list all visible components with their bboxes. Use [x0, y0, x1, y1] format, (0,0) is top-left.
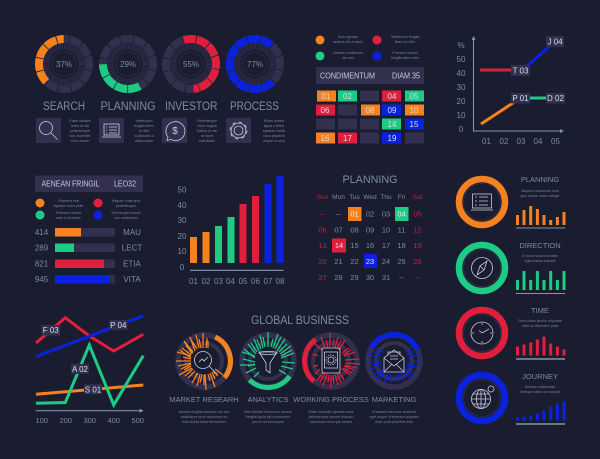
chart: vertical bar chart: 20	[178, 232, 187, 241]
calendar text: 31	[382, 273, 390, 282]
chart: vertical bar chart: 10	[178, 247, 187, 256]
panel: planning metric	[459, 175, 565, 228]
icon: laptop list	[99, 118, 124, 143]
calendar text: 01	[350, 210, 359, 218]
chart: multi-line chart: 100	[35, 416, 48, 425]
heading bar	[35, 176, 143, 192]
text: process description: Etiam viverra	[264, 119, 284, 123]
text: search description: Etiam facilisis	[69, 119, 91, 123]
calendar text: Thu	[380, 194, 392, 201]
number grid: 17	[343, 134, 352, 143]
panel: analytics gauge: ANALYTICS	[247, 395, 289, 404]
calendar text: --	[399, 273, 404, 282]
calendar text: 02	[366, 210, 374, 218]
calendar text: --	[320, 210, 325, 218]
calendar text: 12	[413, 226, 422, 234]
panel: analytics gauge: Sed ultricies lectus non laoreet	[244, 410, 292, 414]
panel: marketing gauge	[358, 325, 430, 424]
calendar text: 27	[318, 273, 327, 282]
calendar text: Sat	[413, 194, 423, 201]
calendar text: 21	[334, 257, 343, 266]
heading bar	[316, 67, 424, 84]
calendar text: Fri	[398, 194, 405, 201]
chart: milestone line chart: 10	[457, 111, 466, 120]
gauge	[358, 325, 430, 397]
calendar text: 13	[318, 241, 327, 250]
ring: planning 29%: 29%	[120, 60, 136, 69]
number grid: 09	[388, 106, 397, 115]
panel: journey metric: JOURNEY	[522, 372, 558, 381]
progress bars: 945	[35, 275, 49, 284]
calendar text: Tus	[349, 194, 361, 201]
chart: vertical bar chart: 01	[189, 277, 198, 286]
text: search description: tellus id nisi	[71, 124, 89, 128]
legend: libero at nibh	[395, 40, 415, 44]
legend: egestas tortor pelle	[54, 204, 83, 208]
calendar text: 05	[413, 210, 422, 218]
calendar text: 04	[397, 210, 406, 218]
text: investor description: finibus id nisl	[197, 129, 217, 133]
chart: multi-line chart	[35, 316, 144, 425]
chart: multi-line chart: 300	[83, 416, 96, 425]
legend: dui sed	[342, 56, 354, 60]
chart: multi-line chart: F 03	[43, 326, 59, 335]
panel: planning metric: quis ornare luctus integer	[520, 194, 560, 198]
panel: marketing gauge: dolor proin pharetra ante	[375, 420, 413, 424]
legend	[316, 35, 419, 60]
chart: vertical bar chart: 07	[264, 277, 273, 286]
chart: milestone line chart: 40	[457, 69, 466, 78]
panel: progress rings	[29, 29, 290, 113]
panel: journey metric	[459, 372, 565, 424]
ring labels: INVESTOR	[165, 99, 218, 113]
chart: vertical bar chart: 05	[239, 277, 248, 286]
calendar text: 09	[366, 226, 374, 234]
ring labels: PLANNING	[100, 99, 156, 113]
chart: vertical bar chart: 50	[178, 186, 187, 194]
legend: pellentesque	[116, 204, 136, 208]
chart: milestone line chart: 0	[459, 125, 464, 134]
chart: multi-line chart: 500	[131, 416, 144, 425]
ring: search 37%	[29, 29, 99, 99]
text: planning description: feugiat libero	[134, 124, 154, 128]
calendar text: 17	[382, 241, 390, 250]
panel: market research gauge: vestibulum nunc accumsan eu	[180, 415, 228, 419]
ring labels: SEARCH	[43, 99, 85, 113]
chart: milestone line chart: P 01	[512, 94, 529, 103]
chart: milestone line chart: T 03	[513, 66, 529, 76]
ring: investor 55%: 55%	[183, 60, 199, 69]
legend: nec vestibulum	[114, 216, 138, 220]
chart: multi-line chart: S 01	[85, 385, 102, 394]
number grid: 08	[366, 106, 375, 115]
gauge	[294, 324, 368, 398]
calendar text: 26	[413, 257, 422, 266]
ring: process 77%: 77%	[247, 60, 263, 69]
ring: planning 29%	[94, 30, 162, 98]
chart: milestone line chart: 03	[517, 137, 526, 146]
chart: vertical bar chart: 03	[214, 277, 223, 286]
text: search description: eros ornare	[71, 139, 89, 143]
chart: vertical bar chart: 08	[276, 277, 285, 286]
chart: multi-line chart: A 02	[72, 365, 89, 374]
mini bars	[518, 206, 564, 225]
calendar text: Wed	[363, 194, 377, 201]
progress bars	[35, 228, 142, 284]
number grid: 10	[410, 106, 419, 115]
panel: market research gauge	[169, 326, 239, 424]
chart: multi-line chart: 400	[107, 416, 120, 425]
heading bar: DIAM 35	[392, 72, 420, 80]
icon: compass in green ring	[459, 245, 505, 291]
chart: milestone line chart: %	[457, 41, 465, 50]
panel: analytics gauge: fringilla ligula elit consectetur	[246, 415, 291, 419]
number grid: 02	[343, 92, 352, 101]
calendar text: 11	[398, 226, 405, 234]
chart: milestone line chart: 02	[500, 137, 509, 146]
text: process description: nunc placerat	[263, 134, 285, 138]
calendar text: --	[415, 273, 420, 282]
legend: Aliquam vitae arcu	[112, 199, 140, 203]
number grid: 14	[388, 120, 397, 129]
legend: ante id faucibus	[56, 216, 81, 220]
text: process description: ligula a tellus	[264, 124, 284, 128]
calendar text	[317, 194, 423, 282]
heading: global business: GLOBAL BUSINESS	[251, 315, 349, 327]
panel: working process gauge: Etiam molestie egestas tortor	[308, 410, 354, 414]
mini bars	[518, 271, 564, 290]
icon: gear	[226, 118, 251, 143]
legend: Praesent molest	[392, 51, 418, 55]
gauge	[169, 326, 239, 396]
day highlights	[332, 207, 408, 268]
chart: milestone line chart: J 04	[547, 38, 563, 46]
text: investor description: sollicitudin	[199, 139, 215, 143]
chart: milestone line chart: 50	[457, 55, 466, 64]
panel: time metric: TIME	[531, 306, 549, 315]
chart: vertical bar chart: 04	[226, 277, 235, 286]
chart: milestone line chart: 01	[482, 137, 491, 146]
legend: Sed feugiat mauris	[111, 211, 141, 215]
ring: search 37%: 37%	[56, 60, 72, 69]
legend: Aenean vestibulum	[333, 51, 363, 55]
text: investor description: sit amet	[201, 134, 213, 138]
chart: milestone line chart: 04	[534, 137, 543, 146]
chart: milestone line chart: 20	[457, 97, 466, 106]
text: planning description: ullamcorper	[135, 139, 154, 143]
mini bars	[518, 402, 564, 420]
chart: multi-line chart: 200	[59, 416, 72, 425]
chart: vertical bar chart: 06	[251, 277, 260, 286]
icon: globe in blue ring	[459, 375, 505, 421]
panel: working process gauge	[293, 324, 369, 424]
heading bar: LEO32	[114, 180, 136, 188]
panel: market research gauge: MARKET RESEARH	[169, 395, 239, 404]
calendar text: 24	[382, 257, 390, 266]
panel: aenean fringil progress bars	[35, 176, 143, 284]
chart: vertical bar chart: 0	[180, 263, 185, 272]
calendar text: 03	[382, 210, 390, 218]
calendar text: Sun	[317, 194, 329, 201]
calendar text: 22	[350, 257, 359, 266]
chart: milestone line chart	[457, 36, 565, 146]
panel: direction metric: DIRECTION	[519, 241, 561, 250]
legend: Vestibulum feugiat	[391, 35, 419, 39]
number grid: 05	[410, 92, 419, 101]
panel: working process gauge: WORKING PROCESS	[293, 395, 369, 404]
chart: vertical bar chart: 02	[202, 277, 211, 286]
icon: dollar bubble	[162, 118, 187, 143]
calendar text: 18	[397, 241, 406, 250]
ring labels	[43, 99, 279, 113]
number grid: 15	[410, 120, 419, 129]
calendar text: 19	[413, 241, 422, 250]
panel: marketing gauge: MARKETING	[372, 395, 416, 404]
number grid: 19	[388, 134, 397, 143]
panel: market research gauge: Aenean fringilla interdum leo nec	[179, 410, 230, 414]
calendar text: 30	[366, 273, 374, 282]
text: planning description: at nibh	[139, 129, 149, 133]
calendar text: 16	[366, 241, 374, 250]
legend: Praesent erat	[58, 199, 79, 203]
text: search description: non imperdiet	[69, 134, 91, 138]
panel: marketing gauge: eget augue id interdum aliquam	[369, 415, 419, 419]
chart: multi-line chart: P 04	[110, 321, 127, 330]
panel: direction metric: eget massa suscipit	[525, 259, 555, 263]
panel: planning metric: Aliquam accumsan urna	[521, 189, 559, 193]
calendar text: 20	[318, 257, 327, 266]
number grid: 16	[321, 134, 330, 143]
legend: fringilla libero sitm	[391, 56, 419, 60]
panel: market research gauge: duis lacinia tortor fermentum	[182, 420, 226, 424]
calendar text: 06	[318, 226, 327, 234]
progress bars: ETIA	[123, 260, 142, 268]
text: investor description: Pellentesque	[197, 119, 217, 123]
heading bar: CONDIMENTUM	[320, 72, 375, 80]
icon: dollar bubble: $	[172, 126, 178, 137]
chart: milestone line chart: 05	[551, 137, 560, 146]
text: planning description: Vestibulum	[135, 119, 153, 123]
panel: direction metric	[459, 241, 565, 294]
heading bar: AENEAN FRINGIL	[42, 180, 100, 188]
number grid: 04	[388, 92, 397, 101]
panel: journey metric: tristique varius ut suscipit	[520, 390, 560, 394]
number grid	[316, 90, 424, 144]
text: investor description: risus magna	[197, 124, 217, 128]
calendar text: 14	[335, 241, 343, 250]
text: process description: egestas mattis	[263, 129, 286, 133]
progress bars: 414	[35, 228, 49, 237]
text: planning description: sollicitudin a	[134, 134, 154, 138]
chart: vertical bar chart: 40	[178, 201, 187, 210]
icon: laptop in orange ring	[459, 179, 505, 225]
panel: time metric: Sed a risus iaculis vulputate	[518, 319, 562, 323]
calendar text: 08	[350, 226, 359, 234]
calendar text: 25	[397, 257, 406, 266]
ring: process 77%	[220, 29, 290, 99]
legend: facilisis elit ut iaculi	[333, 40, 363, 44]
panel: analytics gauge: purus vel consequat	[252, 420, 284, 424]
text: search description: pellentesque	[70, 129, 90, 133]
chart: vertical bar chart	[178, 176, 285, 286]
ring: investor 55%	[160, 33, 222, 95]
panel: time metric: nulla ac bibendum justo	[522, 324, 558, 328]
panel: direction metric: In tortor lacus convallis	[522, 254, 558, 258]
panel: time metric	[459, 306, 565, 359]
panel: working process gauge: accumsan urna quis ornare	[310, 420, 352, 424]
panel: analytics gauge	[231, 324, 305, 424]
progress bars: VITA	[123, 275, 141, 284]
calendar text: 23	[366, 257, 374, 266]
panel: journey metric: Aenean malesuada	[525, 385, 555, 389]
mini bars	[518, 336, 564, 356]
calendar text: --	[336, 210, 341, 218]
heading: PLANNING	[342, 174, 398, 186]
panel: condimentum legend and grid	[316, 35, 424, 144]
icon: clock in red ring	[459, 310, 505, 356]
calendar text: 10	[382, 226, 390, 234]
progress bars: 289	[35, 244, 49, 252]
number grid: 01	[322, 92, 331, 101]
progress bars: MAU	[123, 228, 141, 237]
progress bars: LECT	[122, 244, 142, 252]
chart: milestone line chart: 30	[457, 83, 466, 92]
panel: calendar	[317, 174, 423, 282]
progress bars: 821	[35, 260, 49, 268]
calendar text: 07	[334, 226, 343, 234]
icon: magnifier	[36, 118, 61, 143]
legend	[36, 198, 141, 220]
chart: milestone line chart: D 02	[547, 94, 564, 103]
gauge	[231, 324, 305, 398]
legend: Praesent lacinia	[56, 211, 81, 215]
panel: marketing gauge: Praesent erat nunc tincidunt	[372, 410, 416, 414]
chart: vertical bar chart: 30	[178, 216, 187, 225]
ring labels: PROCESS	[230, 99, 279, 113]
number grid: 06	[321, 106, 330, 115]
calendar text: Mon	[332, 194, 345, 201]
legend: Duis egestas	[338, 35, 358, 39]
panel: planning metric: PLANNING	[521, 175, 559, 184]
panel: working process gauge: pellentesque laoreet aliquam	[309, 415, 353, 419]
text: process description: neque et arcu	[263, 139, 285, 143]
calendar text: 29	[350, 273, 359, 282]
calendar text: 15	[350, 241, 359, 250]
calendar text: 28	[334, 273, 343, 282]
panel: icon tiles with descriptions	[36, 118, 286, 143]
